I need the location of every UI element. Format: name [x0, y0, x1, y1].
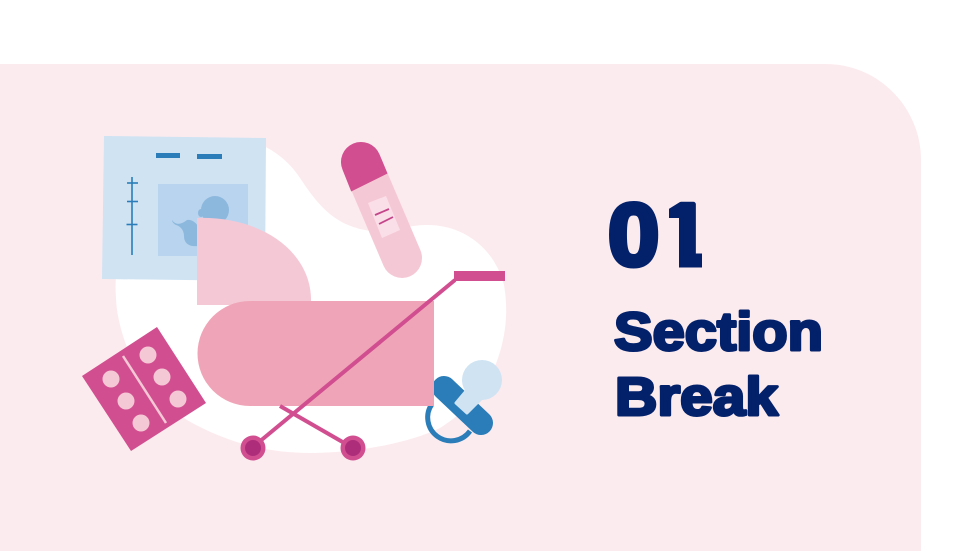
stroller handle	[454, 271, 505, 281]
heading line two: Break	[615, 367, 779, 427]
ultrasound sheet	[102, 136, 266, 281]
right wheel	[340, 436, 366, 460]
pills	[102, 346, 186, 432]
measuring scale	[126, 177, 138, 255]
icon: pill blister pack	[82, 327, 206, 451]
pacifier teat	[456, 360, 502, 413]
white blob backdrop	[116, 138, 506, 453]
test body	[361, 162, 402, 258]
icon: pacifier	[428, 360, 502, 441]
result lines	[375, 209, 393, 224]
icon: pregnancy test	[341, 142, 402, 258]
pacifier shield	[444, 388, 481, 423]
scan image	[158, 184, 248, 256]
result window	[368, 196, 400, 238]
icon: stroller	[197, 218, 505, 460]
stroller frame	[253, 280, 455, 448]
icon: ultrasound scan	[102, 136, 266, 281]
blister divider	[123, 356, 166, 423]
stroller basket	[198, 301, 434, 406]
heading	[614, 302, 823, 427]
baby silhouette	[172, 196, 229, 246]
left wheel	[240, 436, 266, 460]
blister sheet	[82, 327, 206, 451]
header dashes	[156, 153, 222, 159]
test cap	[341, 142, 388, 192]
heading line one: Section	[614, 302, 823, 362]
section number: 01	[608, 186, 710, 285]
pacifier ring	[428, 404, 470, 441]
stroller hood	[197, 218, 311, 305]
